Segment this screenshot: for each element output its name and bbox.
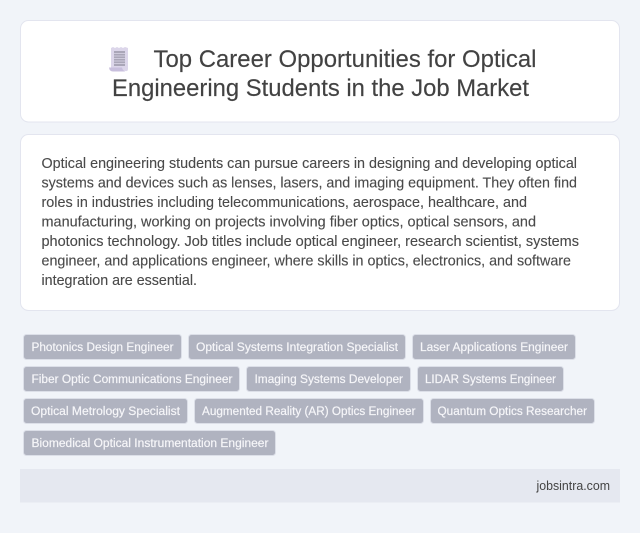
text block: description: manufacturing, working on projects involving fiber optics, optical sensors, and <box>42 214 536 230</box>
tag: Laser Applications Engineer: Laser Applications Engineer <box>420 340 568 354</box>
tag: Quantum Optics Researcher <box>430 398 594 424</box>
tag: LIDAR Systems Engineer: LIDAR Systems Engineer <box>425 372 556 386</box>
tag: Photonics Design Engineer <box>24 334 182 360</box>
tag: Optical Metrology Specialist <box>24 398 188 424</box>
text block: description: engineer, and applications engineer, where skills in optics, electronics, and software <box>42 254 571 270</box>
icon: document scroll <box>109 47 128 72</box>
text block: description: Optical engineering students can pursue careers in designing and developing optical <box>42 156 577 172</box>
heading: title <box>112 46 536 102</box>
text block: description <box>42 156 579 289</box>
heading: title: Engineering Students in the Job Market <box>112 75 529 102</box>
heading: title: Top Career Opportunities for Optical <box>154 46 536 73</box>
tag: Augmented Reality (AR) Optics Engineer <box>194 398 424 424</box>
tag: Biomedical Optical Instrumentation Engineer <box>24 430 276 456</box>
tag list <box>24 334 594 456</box>
footer <box>20 469 620 502</box>
tag: LIDAR Systems Engineer <box>418 366 564 392</box>
footer source text: jobsintra.com <box>536 479 610 493</box>
tag: Fiber Optic Communications Engineer: Fiber Optic Communications Engineer <box>32 372 232 386</box>
tag: Optical Systems Integration Specialist <box>188 334 406 360</box>
text block: description: photonics technology. Job titles include optical engineer, research scientist, systems <box>42 234 579 250</box>
tag: Imaging Systems Developer: Imaging Systems Developer <box>254 372 403 386</box>
tag: Optical Systems Integration Specialist: Optical Systems Integration Specialist <box>196 340 399 354</box>
text block: description: integration are essential. <box>42 273 197 289</box>
panel: header <box>20 20 620 122</box>
tag: Imaging Systems Developer <box>246 366 410 392</box>
tag: Biomedical Optical Instrumentation Engineer: Biomedical Optical Instrumentation Engineer <box>32 436 268 450</box>
tag: Optical Metrology Specialist: Optical Metrology Specialist <box>31 404 181 418</box>
tag: Augmented Reality (AR) Optics Engineer: Augmented Reality (AR) Optics Engineer <box>202 404 416 418</box>
panel: description <box>20 134 620 310</box>
tag: Quantum Optics Researcher: Quantum Optics Researcher <box>438 404 587 418</box>
tag: Laser Applications Engineer <box>412 334 576 360</box>
tag: Photonics Design Engineer: Photonics Design Engineer <box>32 340 174 354</box>
text block: description: systems and devices such as lenses, lasers, and imaging equipment. They often find <box>42 176 577 192</box>
tag: Fiber Optic Communications Engineer <box>24 366 240 392</box>
text block: description: roles in industries including telecommunications, aerospace, healthcare, and <box>42 195 527 211</box>
